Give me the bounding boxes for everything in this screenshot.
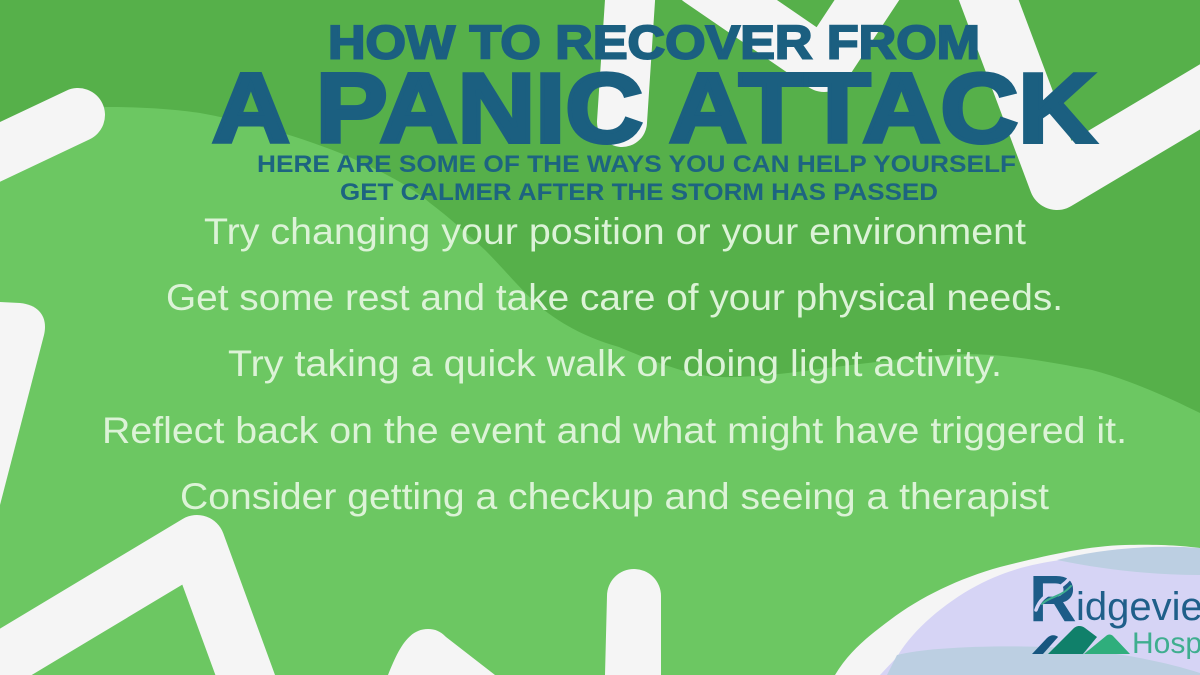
swoosh: lavender panel — [880, 548, 1200, 675]
bottom right corner swoosh — [835, 545, 1200, 675]
zigzag: top V — [700, 0, 890, 65]
swoosh: blue bottom band — [887, 646, 1200, 675]
swoosh: white sliver — [835, 545, 1200, 675]
logo: blue stripe — [1032, 635, 1058, 654]
decorative white zigzags — [0, 0, 1200, 182]
zigzag: bottom left peak — [0, 515, 275, 675]
list of recovery tips: Get some rest and take care of your physical needs. — [166, 277, 1063, 318]
list of recovery tips: Try taking a quick walk or doing light activity. — [228, 343, 1002, 384]
zigzag: bottom vertical stroke — [605, 569, 661, 675]
logo: big R: R — [1029, 561, 1077, 635]
subtitle — [257, 151, 1016, 206]
list of recovery tips: Reflect back on the event and what might have triggered it. — [102, 410, 1127, 451]
background: dark green wave — [0, 0, 1200, 413]
zigzag: top centre stroke — [622, 0, 632, 122]
logo: R swoosh lines — [1036, 578, 1071, 610]
zigzag: bottom small peak — [388, 629, 495, 675]
list of recovery tips: Try changing your position or your environment — [204, 211, 1027, 252]
logo: dark green mountain — [1048, 626, 1097, 654]
list of recovery tips: Consider getting a checkup and seeing a therapist — [180, 476, 1050, 517]
logo: light green mountain — [1084, 634, 1130, 654]
title line 2: A PANIC ATTACK — [212, 53, 1096, 163]
title line 1: HOW TO RECOVER FROM — [328, 16, 980, 68]
logo: Ridgeview Hospital — [1029, 561, 1200, 660]
subtitle: HERE ARE SOME OF THE WAYS YOU CAN HELP YOURSELF — [257, 151, 1016, 178]
zigzag: top right check — [985, 0, 1200, 182]
list of recovery tips — [102, 211, 1127, 517]
zigzag: top left stroke — [0, 115, 78, 166]
subtitle: GET CALMER AFTER THE STORM HAS PASSED — [340, 179, 938, 206]
left white shape — [0, 302, 45, 505]
swoosh: blue top band — [1057, 547, 1200, 575]
